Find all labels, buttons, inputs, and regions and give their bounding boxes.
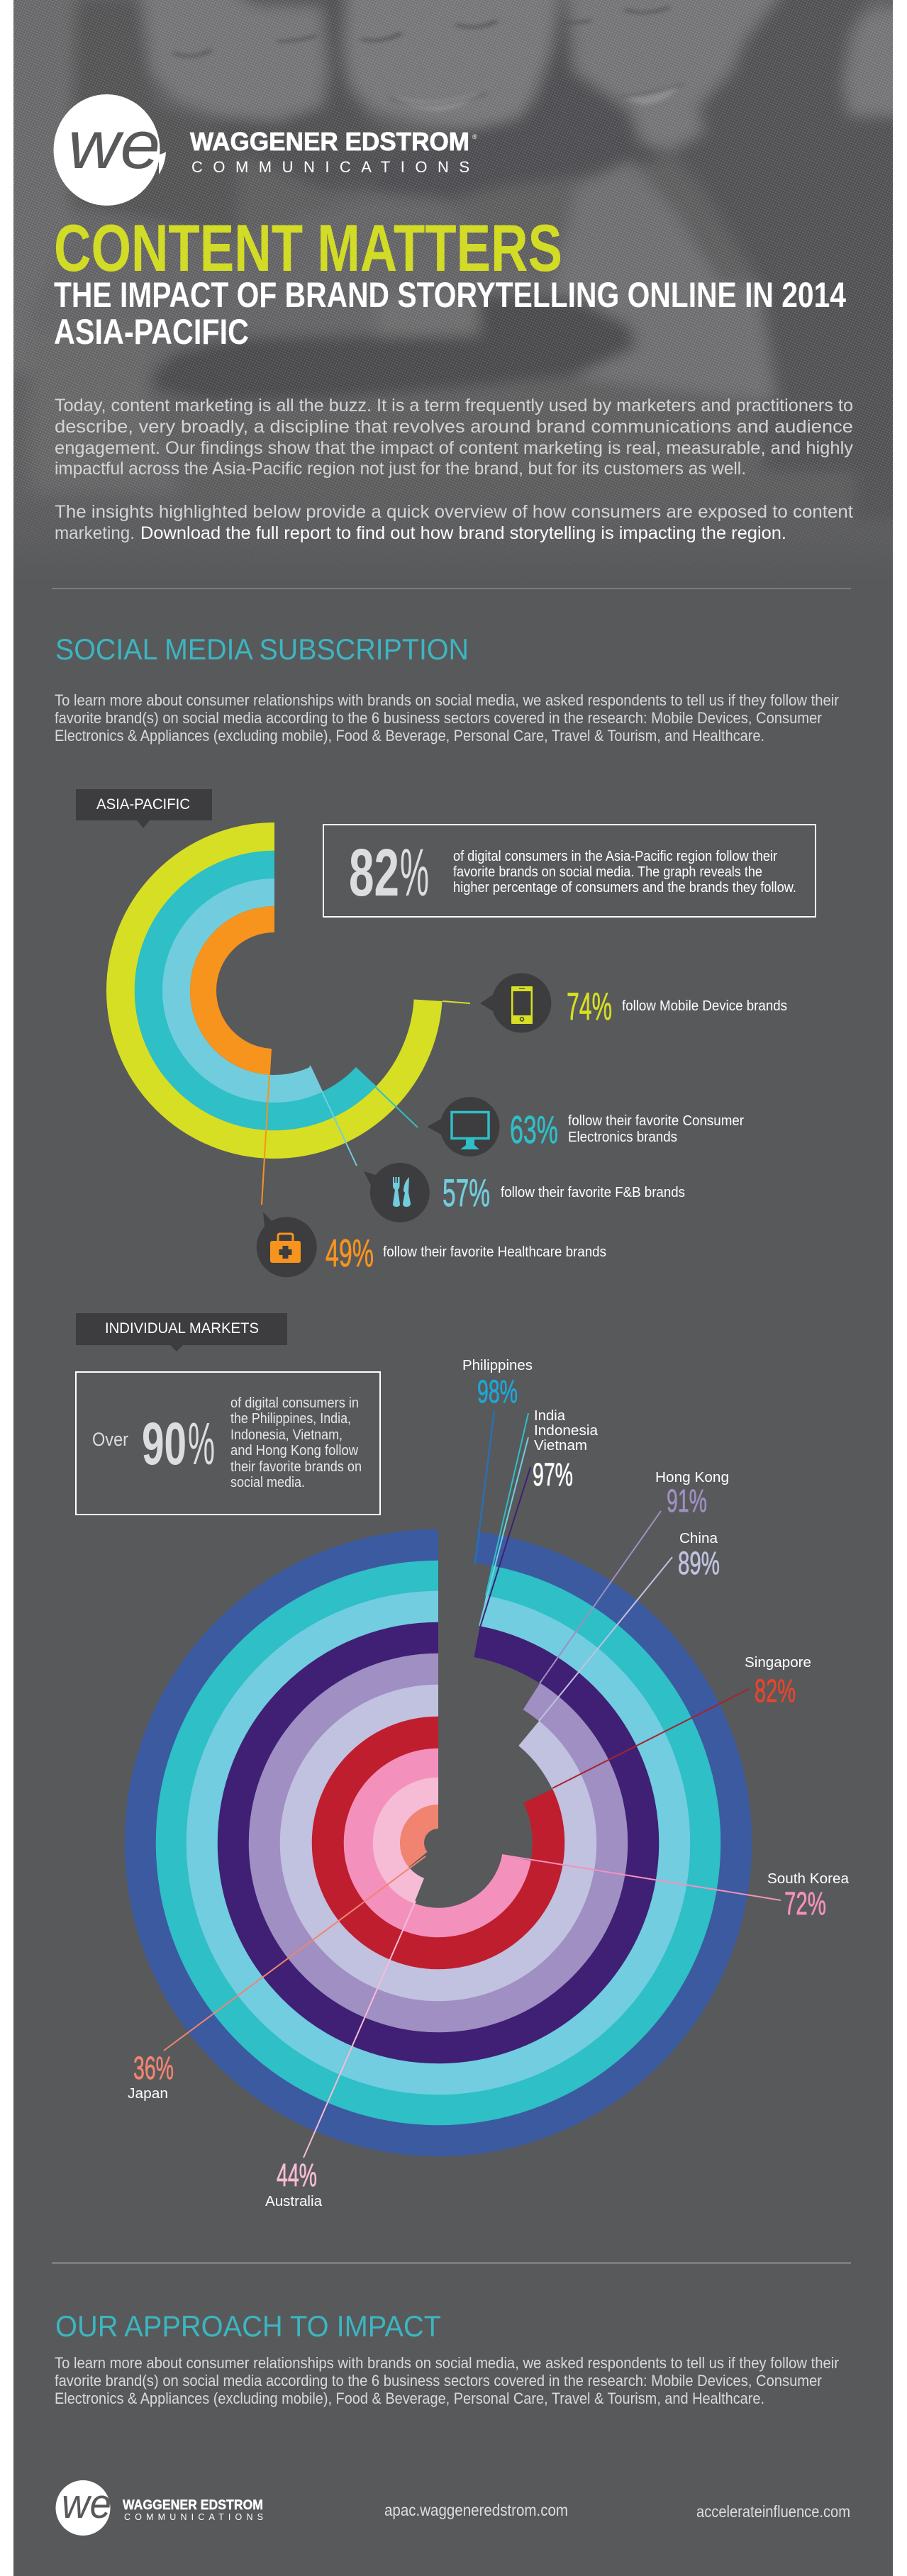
social media intro text: favorite brand(s) on social media according to the 6 business sectors covered in the research: Mobile Devices, Consumer <box>55 709 822 727</box>
label: south korea: South Korea <box>767 1871 850 1887</box>
social media intro text: To learn more about consumer relationships with brands on social media, we asked respondents to tell us if they follow their <box>55 691 839 709</box>
label: Electronics brands <box>568 1130 677 1145</box>
icon: monitor <box>427 1097 500 1156</box>
label: india, indonesia, vietnam <box>533 1408 599 1493</box>
label: follow their favorite Consumer <box>568 1113 744 1129</box>
tag: individual markets: INDIVIDUAL MARKETS <box>105 1320 259 1337</box>
callout: over 90 percent: % <box>188 1410 215 1477</box>
icon: medical case <box>257 1212 317 1277</box>
intro text: The insights highlighted below provide a quick overview of how consumers are exposed to content <box>55 502 853 522</box>
label: philippines <box>462 1358 533 1410</box>
label: philippines: Philippines <box>462 1358 533 1373</box>
company name: COMMUNICATIONS <box>191 158 469 176</box>
label: australia <box>265 2157 323 2209</box>
label: follow their favorite Healthcare brands <box>383 1244 606 1260</box>
logo badge <box>54 94 166 206</box>
callout: over 90 percent: and Hong Kong follow <box>230 1443 359 1459</box>
label: follow their favorite F&B brands <box>501 1185 685 1200</box>
footer logo: WAGGENER EDSTROM <box>123 2498 263 2513</box>
company name: WAGGENER EDSTROM <box>190 127 469 156</box>
item: mobile device <box>480 974 787 1033</box>
callout: over 90 percent: their favorite brands on <box>230 1459 362 1475</box>
chart rings <box>121 837 428 1144</box>
intro text: marketing. <box>55 523 135 543</box>
approach text: Electronics & Appliances (excluding mobile), Food & Beverage, Personal Care, Travel & Tourism, and Healthcare. <box>55 2390 764 2407</box>
callout: over 90 percent: the Philippines, India, <box>230 1411 351 1427</box>
leader lines <box>164 1410 781 2158</box>
chart rings <box>140 1545 736 2141</box>
callout: over 90 percent: of digital consumers in <box>230 1395 359 1411</box>
callout: over 90 percent: Indonesia, Vietnam, <box>230 1427 343 1443</box>
main title: CONTENT MATTERS <box>54 211 562 285</box>
leader lines <box>262 1001 470 1205</box>
heading: social media subscription: SOCIAL MEDIA SUBSCRIPTION <box>55 632 469 666</box>
subtitle <box>54 275 846 352</box>
item: healthcare <box>257 1212 606 1277</box>
approach text: To learn more about consumer relationships with brands on social media, we asked respondents to tell us if they follow their <box>55 2354 839 2372</box>
subtitle: ASIA-PACIFIC <box>54 312 249 352</box>
callout: 82 percent: favorite brands on social media. The graph reveals the <box>453 864 762 880</box>
callout: 82 percent: 82 <box>349 835 399 910</box>
tag: asia-pacific: ASIA-PACIFIC <box>96 796 190 813</box>
label: hong kong <box>655 1470 729 1519</box>
label: south korea <box>767 1871 850 1922</box>
callout: over 90 percent: Over <box>92 1429 128 1450</box>
label: japan: 36% <box>133 2050 174 2086</box>
label: follow Mobile Device brands <box>622 998 787 1014</box>
label: hong kong: Hong Kong <box>655 1470 729 1485</box>
label: australia: Australia <box>265 2194 323 2209</box>
intro text: describe, very broadly, a discipline that revolves around brand communications and audience <box>55 417 853 437</box>
icon: phone <box>480 974 551 1033</box>
intro text: Download the full report to find out how brand storytelling is impacting the region. <box>140 523 786 543</box>
value: 49% <box>325 1231 374 1275</box>
social media intro text: Electronics & Appliances (excluding mobile), Food & Beverage, Personal Care, Travel & Tourism, and Healthcare. <box>55 727 764 745</box>
label: australia: 44% <box>277 2157 317 2193</box>
label: china: China <box>679 1531 718 1546</box>
intro text: engagement. Our findings show that the impact of content marketing is real, measurable, and highly <box>55 438 853 458</box>
label <box>568 1113 744 1145</box>
item: food and beverage <box>364 1163 685 1222</box>
header logo <box>54 94 477 206</box>
label: philippines: 98% <box>477 1373 518 1410</box>
footer logo <box>55 2480 263 2536</box>
company name <box>190 127 477 176</box>
tag: individual markets <box>76 1313 287 1351</box>
social media intro text <box>55 691 839 745</box>
label: india, indonesia, vietnam: 97% <box>533 1456 573 1493</box>
label: china: 89% <box>678 1545 720 1581</box>
label: japan: Japan <box>128 2086 168 2102</box>
footer logo: we <box>62 2481 111 2527</box>
label: india, indonesia, vietnam: Indonesia <box>534 1423 599 1439</box>
callout: 82 percent: % <box>400 835 429 910</box>
callout: 82 percent: of digital consumers in the Asia-Pacific region follow their <box>453 849 777 864</box>
label: india, indonesia, vietnam: India <box>534 1408 566 1424</box>
approach text <box>55 2354 839 2407</box>
label: singapore: 82% <box>755 1673 796 1709</box>
callout: over 90 percent: 90 <box>142 1410 187 1477</box>
icon: cutlery <box>364 1163 430 1222</box>
label: singapore <box>745 1655 811 1709</box>
label: japan <box>128 2050 174 2102</box>
label: india, indonesia, vietnam: Vietnam <box>534 1438 587 1454</box>
value: 74% <box>567 984 612 1028</box>
approach text: favorite brand(s) on social media according to the 6 business sectors covered in the research: Mobile Devices, Consumer <box>55 2372 822 2390</box>
header photo of three women <box>13 0 893 559</box>
tag: asia-pacific <box>76 789 212 828</box>
intro text: impactful across the Asia-Pacific region not just for the brand, but for its customers as well. <box>55 459 746 479</box>
value: 57% <box>443 1171 490 1215</box>
label: singapore: Singapore <box>745 1655 811 1671</box>
callout: over 90 percent <box>76 1372 380 1515</box>
intro text <box>55 396 853 543</box>
footer url: apac: apac.waggeneredstrom.com <box>384 2501 568 2519</box>
title <box>54 211 846 352</box>
heading: our approach to impact: OUR APPROACH TO IMPACT <box>55 2309 441 2343</box>
label: south korea: 72% <box>784 1885 826 1922</box>
logo badge: we <box>68 107 160 183</box>
label: china <box>678 1531 720 1581</box>
callout: 82 percent: higher percentage of consumers and the brands they follow. <box>453 880 796 896</box>
item: consumer electronics <box>427 1097 744 1156</box>
label: hong kong: 91% <box>667 1483 707 1519</box>
footer url: accelerate influence: accelerateinfluence.com <box>696 2502 850 2521</box>
footer logo: COMMUNICATIONS <box>124 2512 263 2522</box>
intro text: Today, content marketing is all the buzz. It is a term frequently used by marketers and practitioners to <box>55 396 853 416</box>
radial chart: individual markets <box>140 1410 781 2158</box>
value: 63% <box>510 1108 558 1152</box>
radial chart: asia-pacific <box>121 837 470 1205</box>
company name: ® <box>472 133 477 140</box>
callout: over 90 percent: social media. <box>230 1475 305 1490</box>
callout: 82 percent <box>323 825 816 917</box>
